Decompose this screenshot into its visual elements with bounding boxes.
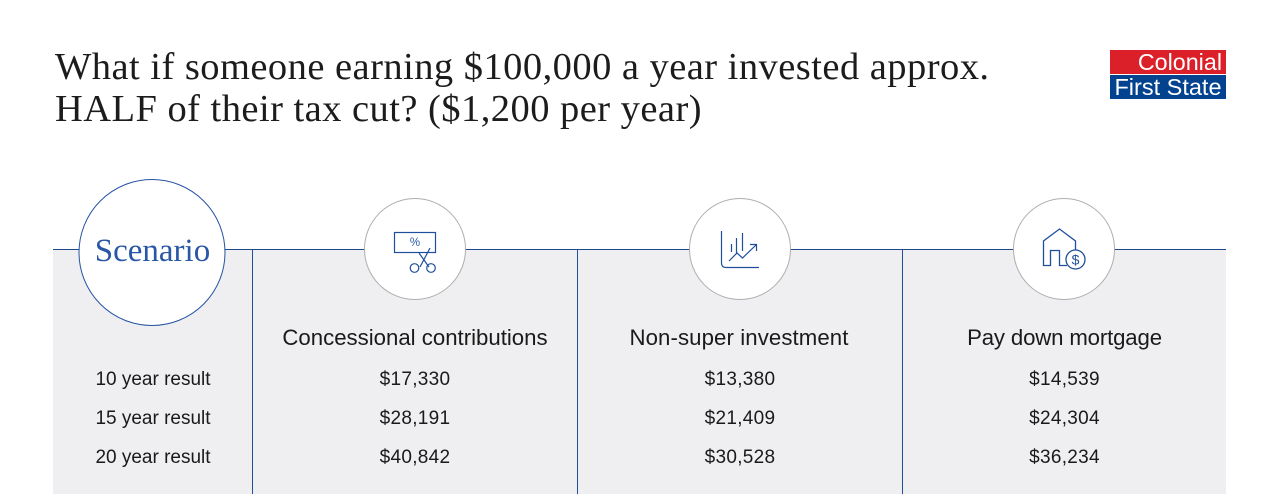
icon: growth chart [720, 231, 759, 268]
icon: scissors cutting percent [394, 232, 436, 273]
logo: Colonial First State: First State [1114, 74, 1222, 100]
title [55, 46, 990, 130]
table background panel [53, 249, 1226, 494]
column: non-super investment: $13,380 [705, 369, 775, 390]
column: non-super investment: $30,528 [705, 447, 775, 468]
column: row labels: 15 year result [95, 408, 211, 429]
column: concessional contributions: Concessional contributions [282, 325, 548, 350]
logo: Colonial First State: Colonial [1138, 49, 1222, 75]
column: pay down mortgage: $36,234 [1029, 447, 1100, 468]
column: concessional contributions [282, 325, 548, 468]
column: concessional contributions: $17,330 [380, 369, 450, 390]
column: pay down mortgage: $24,304 [1029, 408, 1100, 429]
column: pay down mortgage [967, 325, 1162, 468]
column: concessional contributions: $40,842 [380, 447, 450, 468]
scenario label: Scenario [95, 233, 210, 269]
logo: Colonial First State [1110, 49, 1226, 100]
column: non-super investment: $21,409 [705, 408, 775, 429]
column: non-super investment: Non-super investment [629, 325, 849, 350]
column: row labels [95, 369, 211, 468]
title: What if someone earning $100,000 a year invested approx. [55, 46, 990, 88]
icon: house with dollar [1042, 228, 1086, 270]
column: pay down mortgage: Pay down mortgage [967, 325, 1162, 350]
column: non-super investment [629, 325, 849, 468]
title: HALF of their tax cut? ($1,200 per year) [55, 88, 702, 130]
icon: scissors cutting percent: % [410, 237, 420, 249]
column: concessional contributions: $28,191 [380, 408, 450, 429]
column: row labels: 10 year result [95, 369, 211, 390]
column: pay down mortgage: $14,539 [1029, 369, 1100, 390]
icon: house with dollar: $ [1072, 252, 1080, 268]
column: row labels: 20 year result [95, 447, 211, 468]
